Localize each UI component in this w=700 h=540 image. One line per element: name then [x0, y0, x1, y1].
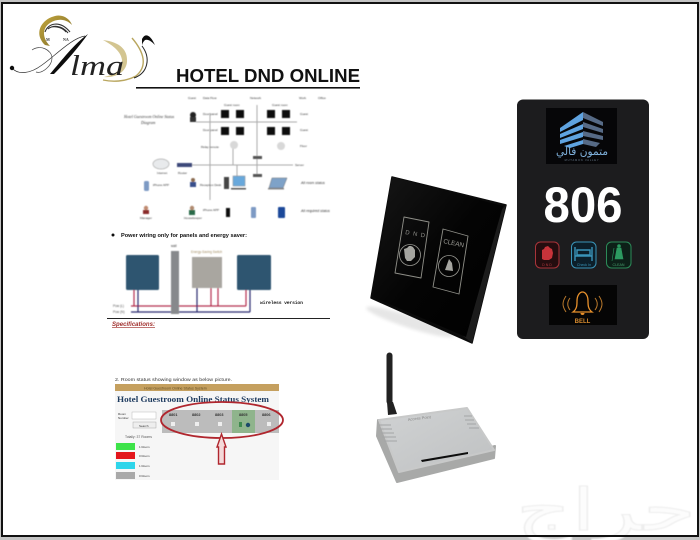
logo: Alma swan: lma	[70, 51, 124, 82]
panel: online status diagram: Server	[295, 163, 304, 167]
logo: Alma swan	[10, 16, 155, 82]
panel: online status diagram: Router	[178, 171, 187, 175]
panel: online status diagram: iPhone APP	[153, 183, 169, 187]
system title: Hotel Guestroom Online Status System	[117, 394, 270, 404]
legend: 0 Room	[139, 474, 150, 478]
logo: Alma swan: M	[46, 37, 50, 42]
room numbers: 8801	[169, 413, 177, 417]
room numbers	[169, 413, 270, 417]
wall switch device	[364, 177, 506, 343]
icon: DND	[536, 242, 559, 268]
icon: clean	[606, 242, 631, 268]
brand label: Access Point	[408, 414, 432, 422]
legend: 1 Room	[139, 464, 150, 468]
icon: DND: D N D	[542, 263, 552, 267]
hotel subtitle: MUTAMON VALLEY	[565, 158, 599, 162]
panel: online status diagram: Guest	[300, 112, 308, 116]
icon: bell	[549, 285, 617, 325]
panel: status system screenshot: Room	[118, 412, 127, 416]
router top	[379, 408, 494, 472]
panel: online status diagram: Data Flow	[203, 96, 217, 100]
panel: online status diagram: Guest	[300, 128, 308, 132]
panel: online status diagram: iPhone APP	[203, 208, 219, 212]
heading: power wiring: Power wiring only for panels and energy saver:	[121, 233, 247, 239]
divider	[107, 318, 330, 319]
diagram labels: Guest	[188, 96, 196, 100]
highlight ellipse	[161, 402, 283, 438]
panel: power wiring diagram: wall	[171, 244, 177, 248]
network wiring	[180, 105, 297, 200]
panel: online status diagram	[123, 96, 330, 220]
panel: power wiring diagram: Energy-Saving Switch	[191, 250, 222, 254]
room number: 806	[544, 177, 622, 233]
icon: check in: Check In	[577, 263, 591, 267]
panel: online status diagram: Housekeeper	[184, 216, 202, 220]
CLEAN button	[433, 229, 468, 294]
antenna	[386, 352, 392, 404]
vents	[379, 416, 479, 441]
router body side	[377, 420, 495, 482]
panel: status system screenshot: Hotel Guestroom Online Status System	[144, 386, 207, 390]
legend: 0 Room	[139, 454, 150, 458]
panel: online status diagram: Reception Desk	[200, 183, 222, 187]
CLEAN button: CLEAN	[443, 238, 465, 249]
icon: check in	[572, 242, 596, 268]
panel: online status diagram: Guest room	[272, 103, 288, 107]
device icons	[153, 159, 169, 169]
panel: online status diagram: Floor	[300, 144, 307, 148]
panel: online status diagram: Network	[250, 96, 262, 100]
room numbers: 8806	[262, 413, 270, 417]
building icon	[560, 112, 603, 148]
panel: online status diagram: All required status	[300, 209, 330, 213]
panel: online status diagram: Manager	[140, 216, 152, 220]
panel: power wiring diagram	[113, 244, 271, 314]
panel: online status diagram: Work	[299, 96, 306, 100]
panel: online status diagram: Diagram	[140, 120, 156, 125]
hotel logo	[546, 108, 617, 164]
DND button: D N D	[405, 230, 426, 240]
room numbers: 8805	[239, 413, 247, 417]
label: wireless version: wireless version	[260, 300, 303, 306]
screenshot background	[115, 384, 279, 480]
DND button	[395, 217, 429, 278]
panel: power wiring diagram: Pow (L)	[113, 304, 124, 308]
switch face	[373, 177, 503, 337]
legend: 1 Room	[139, 445, 150, 449]
room numbers: 8803	[215, 413, 223, 417]
title: HOTEL DND ONLINE	[176, 65, 360, 86]
panel modules	[126, 255, 159, 290]
title underline	[136, 87, 360, 89]
panel: online status diagram: All room status	[300, 181, 325, 185]
room panels	[221, 110, 290, 135]
panel: online status diagram: Relay remote	[201, 145, 219, 149]
panel: online status diagram: Door panel	[203, 128, 218, 132]
wall	[171, 251, 179, 314]
router device	[377, 352, 495, 482]
panel: online status diagram: Door panel	[203, 112, 218, 116]
heading: specifications: Specifications:	[112, 321, 155, 328]
panel: online status diagram: Guest room	[224, 103, 240, 107]
panel: online status diagram: Office	[318, 96, 326, 100]
Arabic hotel name: متمون فالي	[556, 145, 608, 158]
wiring lines	[131, 285, 250, 312]
diagram title: Hotel Guestroom Online Status	[123, 114, 175, 119]
search box	[132, 412, 156, 419]
door plate panel	[517, 100, 649, 339]
icon: clean: CLEAN	[613, 263, 625, 267]
logo: Alma swan: NA	[63, 37, 69, 42]
icon: bell: BELL	[575, 319, 591, 325]
panel: status system screenshot: Number	[118, 416, 129, 420]
room total: Totally: 37 Rooms	[125, 435, 152, 439]
panel: online status diagram: Internet	[157, 171, 167, 175]
status slot	[421, 452, 468, 462]
arrow	[217, 434, 226, 464]
panel: status system screenshot: Search	[139, 424, 149, 428]
header bar	[115, 384, 279, 391]
room strip	[162, 410, 279, 433]
cropped caption: 2. Room status showing window as below picture.	[115, 377, 232, 382]
legend	[116, 443, 150, 479]
energy saving switch	[192, 257, 222, 288]
panel: power wiring diagram: Pow (N)	[113, 310, 125, 314]
panel: status system screenshot	[115, 377, 283, 480]
room icons	[171, 422, 271, 427]
room numbers: 8802	[192, 413, 200, 417]
switch edge	[371, 177, 506, 343]
